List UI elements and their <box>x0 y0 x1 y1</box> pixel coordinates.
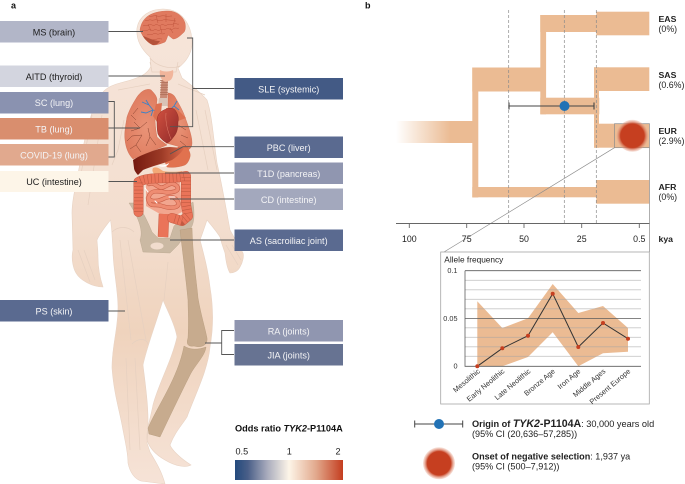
label: MS (brain): MS (brain) <box>33 27 75 37</box>
time axis: 50 <box>519 234 529 244</box>
label: AS (sacroiliac joint): AS (sacroiliac joint) <box>250 236 328 246</box>
grid lines <box>465 280 641 356</box>
colon <box>138 176 188 221</box>
label: TB (lung): TB (lung) <box>35 124 73 134</box>
panel: body anatomy <box>72 9 243 484</box>
label: AS (sacroiliac joint) <box>234 230 343 251</box>
legend: origin: Origin of TYK2-P1104A: 30,000 years old <box>472 418 654 430</box>
label: UC (intestine): UC (intestine) <box>26 177 82 187</box>
label: SAS: SAS <box>658 70 677 80</box>
label: SC (lung): SC (lung) <box>35 98 73 108</box>
label: TB (lung) <box>0 118 108 140</box>
small intestine bed <box>146 180 182 218</box>
body silhouette <box>72 9 243 484</box>
panel label b: b <box>365 0 371 10</box>
label: SAS <box>658 70 684 90</box>
time axis: 75 <box>462 234 472 244</box>
organ: right lung <box>166 93 192 150</box>
x-axis periods: Bronze Age <box>522 367 557 398</box>
negative selection marker <box>616 120 648 152</box>
organ: pancreas <box>152 167 182 176</box>
organ highlight under liver <box>158 163 169 167</box>
x-axis periods <box>451 366 632 406</box>
legend: odds ratio <box>235 424 343 480</box>
legend: odds ratio: 0.5 <box>236 446 248 456</box>
label: RA (joints): RA (joints) <box>268 326 310 336</box>
legend: odds ratio: 2 <box>335 446 341 456</box>
legend: negative selection <box>423 447 631 479</box>
label: AFR: AFR <box>658 182 677 192</box>
legend: odds ratio: 1 <box>287 446 292 456</box>
lung airways <box>127 100 188 152</box>
x-axis periods: Early Neolithic <box>465 366 507 404</box>
label: MS (brain) <box>0 21 108 42</box>
time axis: kya <box>658 234 673 244</box>
time axis: 100 <box>402 234 417 244</box>
label: SC (lung) <box>0 92 108 114</box>
x-axis periods: Late Neolithic <box>493 366 533 402</box>
label: JIA (joints): JIA (joints) <box>267 350 310 360</box>
frequency line <box>477 294 628 366</box>
label: SLE (systemic): SLE (systemic) <box>258 84 319 94</box>
axes <box>465 271 641 366</box>
label: RA (joints) <box>234 320 343 342</box>
bone: tibia <box>148 346 206 437</box>
chart title: Allele frequency <box>444 254 504 264</box>
label: EUR: (2.9%) <box>658 136 684 146</box>
label: SAS: (0.6%) <box>658 80 684 90</box>
label: EAS: EAS <box>658 14 677 24</box>
confidence band <box>477 284 628 366</box>
label: T1D (pancreas) <box>234 162 343 184</box>
label: JIA (joints) <box>234 344 343 366</box>
label: AITD (thyroid): AITD (thyroid) <box>26 72 82 82</box>
x-axis periods: Middle Ages <box>571 366 608 399</box>
rectum <box>163 214 164 237</box>
label: AFR: (0%) <box>658 192 677 202</box>
organ: stomach <box>165 147 190 167</box>
legend: origin <box>415 418 654 439</box>
leader lines <box>108 32 234 354</box>
frequency points <box>475 292 630 368</box>
label: EAS <box>658 14 677 34</box>
label: COVID-19 (lung): COVID-19 (lung) <box>20 150 88 160</box>
time axis: 25 <box>577 234 587 244</box>
panel: population tree <box>396 10 684 252</box>
y-axis values: 0 <box>453 361 458 370</box>
label: PBC (liver): PBC (liver) <box>267 143 311 153</box>
label: AITD (thyroid) <box>0 66 108 87</box>
time axis: 0.5 <box>633 234 646 244</box>
legend: odds ratio: Odds ratio TYK2-P1104A <box>235 424 343 434</box>
label: UC (intestine) <box>0 171 108 192</box>
legend: negative selection: Onset of negative selection: 1,937 ya <box>472 452 631 462</box>
tree branches <box>396 12 649 204</box>
organ: intestines <box>138 176 188 237</box>
origin error bar <box>509 101 594 111</box>
label: EUR: EUR <box>658 126 678 136</box>
y-axis values: 0.05 <box>443 314 458 323</box>
x-axis periods: Present Europe <box>588 367 632 406</box>
organ: brain <box>140 11 185 45</box>
organ: left lung <box>125 89 167 159</box>
organ: liver <box>133 147 184 175</box>
time axis <box>396 224 673 244</box>
label: PS (skin) <box>0 300 108 322</box>
legend: origin: (95% CI (20,636–57,285)) <box>472 429 577 439</box>
organ: thyroid <box>160 70 173 82</box>
legend: negative selection: (95% CI (500–7,912)) <box>472 462 559 472</box>
label: CD (intestine) <box>234 188 343 210</box>
label: SLE (systemic) <box>234 78 343 100</box>
x-axis periods: Iron Age <box>556 367 582 391</box>
faint bones <box>78 58 241 450</box>
y-axis values <box>443 266 458 370</box>
label: PBC (liver) <box>234 136 343 158</box>
zoom box and connector <box>444 124 650 252</box>
dashed time lines <box>509 10 596 224</box>
x-axis periods: Mesolithic <box>451 366 482 394</box>
label: T1D (pancreas): T1D (pancreas) <box>257 169 320 179</box>
panel label a: a <box>11 0 17 10</box>
label: COVID-19 (lung) <box>0 144 108 166</box>
label: EUR <box>658 126 684 146</box>
organ: heart <box>153 103 186 143</box>
label: PS (skin): PS (skin) <box>36 306 72 316</box>
y-axis values: 0.1 <box>447 266 458 275</box>
bone: femur <box>180 228 207 347</box>
panel: allele frequency chart <box>441 252 649 406</box>
organ: trachea <box>158 80 168 106</box>
label: CD (intestine): CD (intestine) <box>261 195 316 205</box>
bone: pelvis <box>129 202 194 253</box>
label: AFR <box>658 182 677 202</box>
label: EAS: (0%) <box>658 24 677 34</box>
